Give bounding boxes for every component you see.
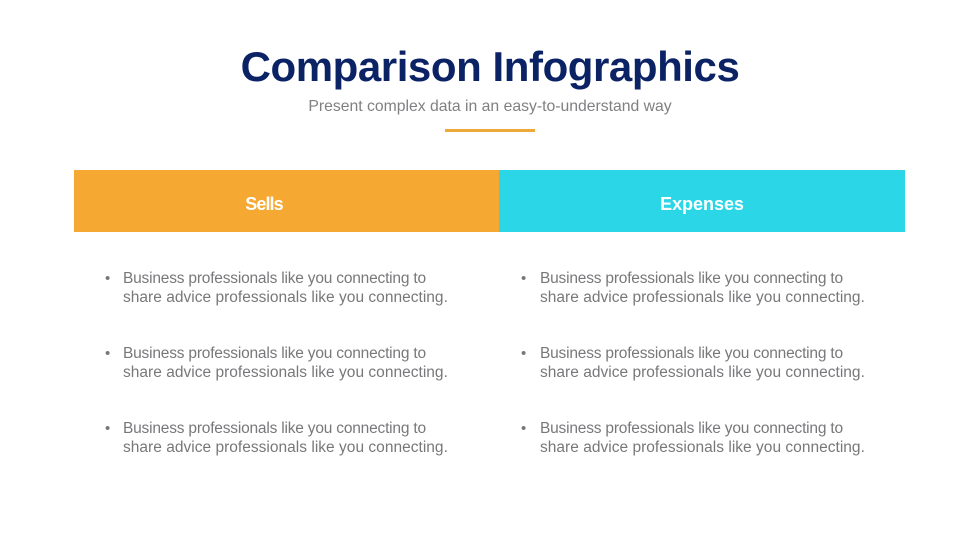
list item: Expenses 2 [521, 345, 865, 381]
list item: Expenses 2: • [521, 345, 526, 362]
list item: Sells 2: Business professionals like you connecting to [123, 345, 426, 362]
list item: Expenses 3: • [521, 420, 526, 437]
list item: Sells 2: • [105, 345, 110, 362]
list item: Sells 2: share advice professionals like you connecting. [123, 364, 448, 381]
subtitle: Present complex data in an easy-to-understand way [308, 98, 672, 115]
list item: Sells 3: • [105, 420, 110, 437]
list item: Expenses 1 [521, 270, 865, 306]
panel header: Expenses: Expenses [660, 194, 744, 214]
list item: Expenses 2: share advice professionals like you connecting. [540, 364, 865, 381]
list item: Sells 3 [105, 420, 448, 456]
panel header: Expenses [499, 170, 905, 232]
panel header: Sells: Sells [245, 194, 283, 214]
title: Comparison Infographics [241, 43, 739, 90]
title underline [445, 129, 535, 132]
list item: Expenses 2: Business professionals like you connecting to [540, 345, 843, 362]
list item: Expenses 3: Business professionals like you connecting to [540, 420, 843, 437]
list item: Expenses 3: share advice professionals like you connecting. [540, 439, 865, 456]
panel header: Sells [74, 170, 499, 232]
list item: Sells 2 [105, 345, 448, 381]
list item: Sells 3: share advice professionals like you connecting. [123, 439, 448, 456]
list item: Sells 1 [105, 270, 448, 306]
list item: Sells 1: • [105, 270, 110, 287]
list item: Expenses 1: Business professionals like you connecting to [540, 270, 843, 287]
list item: Sells 1: Business professionals like you connecting to [123, 270, 426, 287]
list item: Expenses 1: • [521, 270, 526, 287]
list item: Expenses 3 [521, 420, 865, 456]
list item: Expenses 1: share advice professionals like you connecting. [540, 289, 865, 306]
list item: Sells 1: share advice professionals like you connecting. [123, 289, 448, 306]
list item: Sells 3: Business professionals like you connecting to [123, 420, 426, 437]
